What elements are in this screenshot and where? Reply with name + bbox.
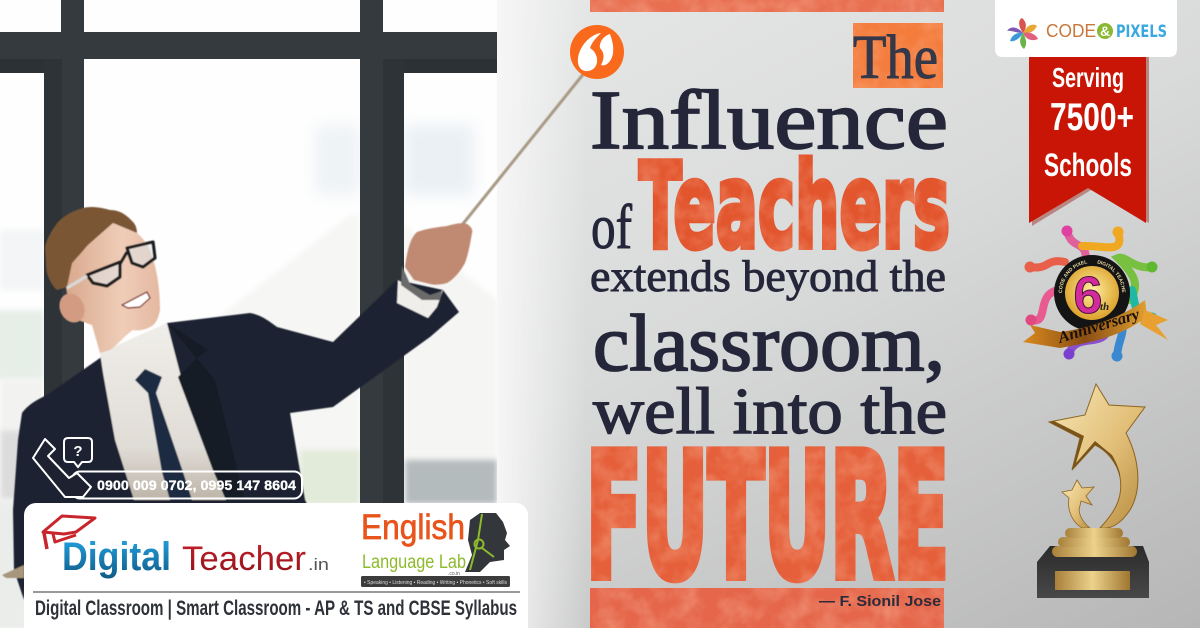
trophy block — [1037, 546, 1149, 598]
Teacher wordmark: Teacher — [182, 540, 306, 578]
name plate — [1055, 571, 1130, 590]
Language Lab: Language Lab — [362, 552, 466, 573]
teacher figure — [2, 72, 585, 600]
neck and face — [66, 223, 160, 353]
skills text: • Speaking • Listening • Reading • Writing • Phonetics • Soft skills — [364, 580, 507, 586]
mouth — [122, 292, 150, 308]
Anniversary: Anniversary — [1055, 306, 1142, 347]
book edge — [2, 565, 24, 578]
top orange stripe — [590, 0, 944, 12]
window frame — [0, 0, 497, 505]
phone number pill — [72, 472, 302, 498]
skills bar — [361, 576, 510, 587]
English: English — [361, 508, 465, 547]
shirt cuff — [397, 280, 443, 318]
PIXELS: PIXELS — [1116, 22, 1167, 42]
of: of — [591, 191, 633, 262]
6th anniversary badge — [1023, 226, 1168, 362]
quote text — [586, 23, 950, 617]
roof and outside scenery — [0, 125, 497, 628]
Serving: Serving — [1052, 62, 1124, 93]
quote badge on pointer — [570, 25, 624, 79]
th: th — [1100, 301, 1109, 313]
glasses — [87, 242, 155, 286]
question bubble: ? — [73, 443, 83, 460]
extends beyond the: extends beyond the — [590, 252, 946, 301]
shirt — [100, 323, 226, 500]
logo panel — [24, 503, 528, 628]
medallion — [1054, 255, 1130, 331]
co.in: .co.in — [448, 571, 460, 577]
ear — [55, 289, 89, 327]
medallion caption left: CODE AND PIXELS — [1058, 260, 1088, 293]
quote marks — [578, 33, 613, 71]
phone contact — [33, 438, 302, 498]
lapel — [167, 323, 245, 500]
stacked base — [1052, 528, 1137, 557]
Schools: Schools — [1044, 147, 1132, 183]
number 6: 6 — [1074, 267, 1102, 325]
pinwheel icon — [1007, 18, 1038, 49]
large star with swoosh — [1049, 384, 1145, 528]
glasses temple — [67, 276, 87, 288]
hand — [405, 223, 472, 285]
well into the: well into the — [593, 375, 947, 448]
medallion caption right: DIGITAL TEACHER — [1097, 260, 1126, 292]
pointer stick — [458, 72, 585, 230]
Influence: Influence — [590, 74, 948, 167]
small star with swoosh — [1062, 480, 1094, 528]
coloured figures — [1030, 231, 1152, 356]
classroom,: classroom, — [593, 300, 945, 388]
The highlight box — [853, 23, 943, 88]
Digital wordmark: Digital — [62, 535, 171, 579]
head silhouette — [465, 513, 510, 572]
.in: .in — [308, 555, 329, 574]
CODE: CODE — [1046, 21, 1096, 41]
wrist watch — [401, 266, 442, 300]
red ribbon — [1029, 57, 1149, 226]
attribution: — F. Sionil Jose — [819, 593, 941, 610]
star bevel — [1049, 421, 1120, 477]
figure heads — [1024, 226, 1158, 362]
headset — [470, 514, 494, 570]
window photo background — [0, 0, 497, 628]
tagline: Digital Classroom | Smart Classroom - AP & TS and CBSE Syllabus — [35, 597, 517, 620]
Code and Pixels logo card — [995, 0, 1177, 57]
hair — [45, 207, 137, 290]
7500+: 7500+ — [1050, 96, 1134, 139]
phone numbers: 0900 009 0702, 0995 147 8604 — [97, 477, 296, 493]
tie — [135, 369, 192, 500]
ampersand badge: & — [1100, 23, 1110, 39]
gold banner — [1023, 300, 1147, 348]
graduation cap icon — [43, 516, 95, 549]
bottom orange stripe — [590, 588, 944, 628]
suit jacket — [13, 280, 459, 600]
phone handset icon — [33, 439, 91, 497]
question bubble — [64, 438, 92, 467]
ampersand badge — [1097, 23, 1113, 39]
The: The — [853, 24, 938, 92]
gold star trophy — [1037, 384, 1149, 598]
English Language Lab logo — [361, 508, 510, 587]
